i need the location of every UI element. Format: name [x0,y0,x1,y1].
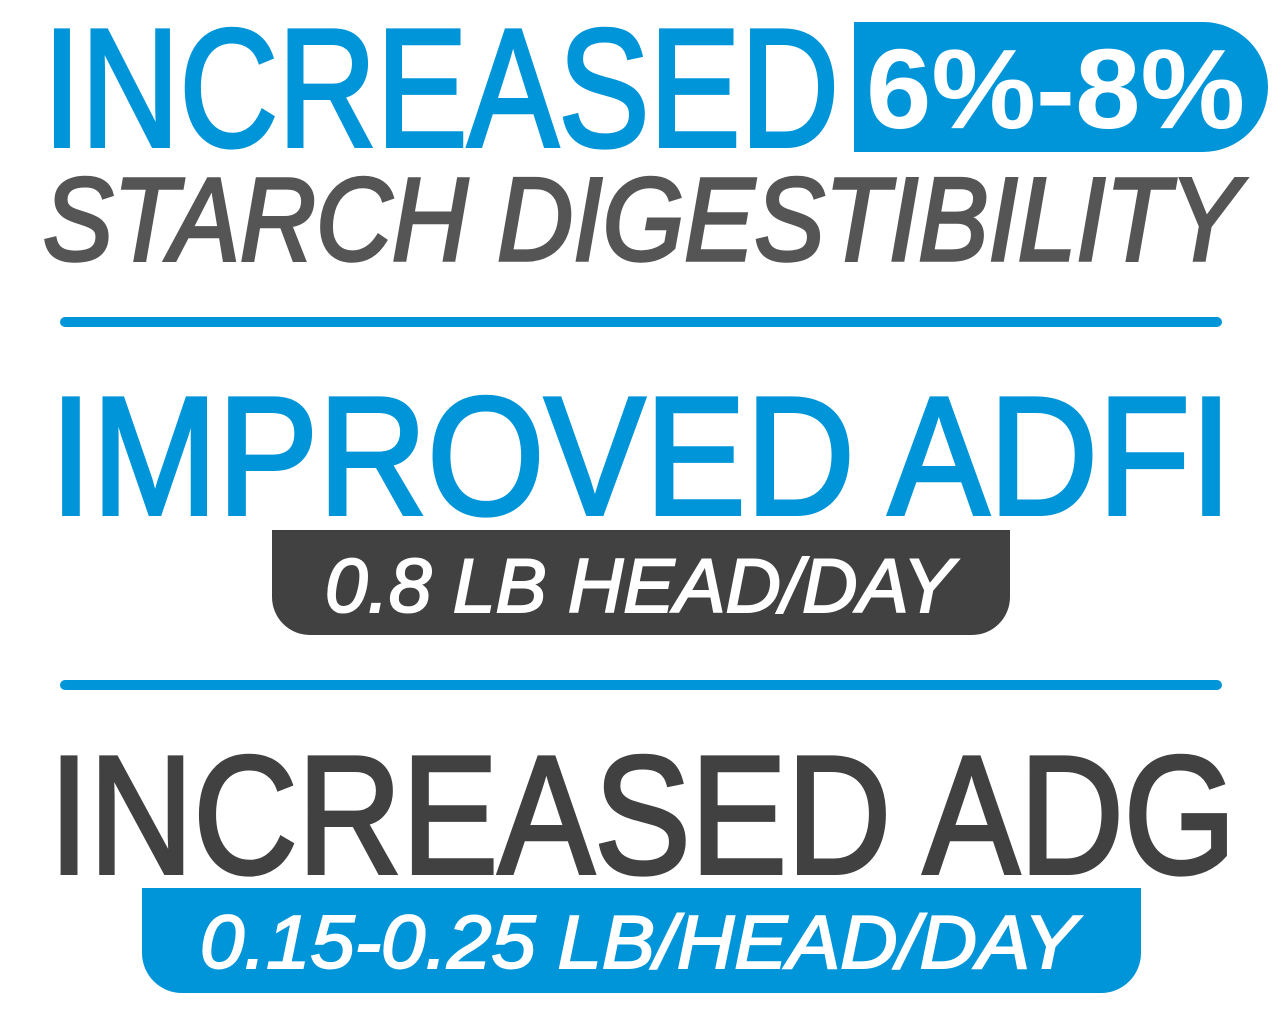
panel: improved ADFI [50,362,1232,635]
badge: 0.8 lb head/day [272,530,1010,635]
badge: 0.15-0.25 lb/head/day [142,888,1141,993]
badge: 6%-8%: 6%-8% [866,26,1245,152]
panel: starch digestibility [43,0,1268,286]
badge: 0.8 lb head/day: 0.8 LB HEAD/DAY [325,544,959,629]
badge: 0.15-0.25 lb/head/day: 0.15-0.25 LB/HEAD/DAY [200,900,1082,984]
panel: increased ADG [49,721,1236,993]
